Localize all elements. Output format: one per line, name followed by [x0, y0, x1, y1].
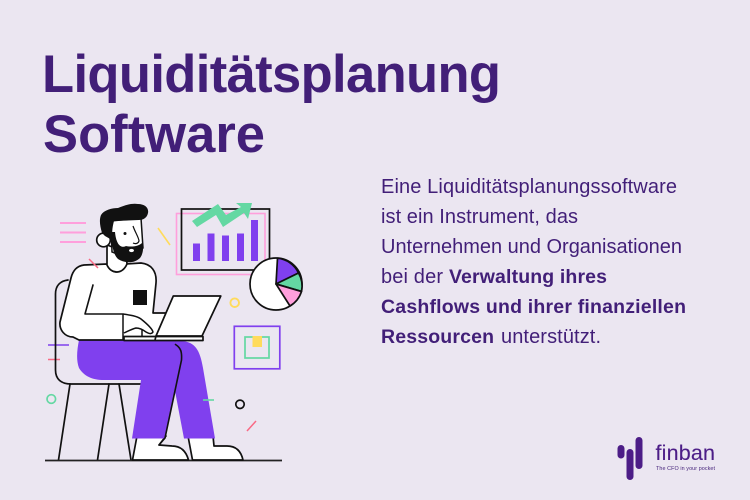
decorative accent: red shoulder dash: [89, 259, 98, 268]
body text block: ist ein Instrument, das: [381, 206, 578, 228]
decorative accent: red lower dash: [247, 421, 256, 431]
chart board with bars: [176, 209, 270, 274]
eye: [124, 232, 126, 235]
body text block: Ressourcen: [381, 326, 494, 348]
body text block: bei der: [381, 266, 443, 288]
body text block: Cashflows und ihrer finanziellen: [381, 296, 686, 318]
knee line: [159, 344, 182, 445]
logo tagline: The CFO in your pocket: [656, 466, 716, 472]
decorative accent: green dash: [203, 399, 214, 401]
title: Liquiditätsplanung: [42, 45, 501, 104]
title: [42, 45, 501, 164]
decorative accent: yellow dash: [158, 228, 170, 245]
shoes: [132, 436, 243, 460]
sleeve lines: [85, 285, 123, 314]
title: Software: [43, 105, 265, 164]
trousers: [77, 340, 215, 438]
laptop: [124, 296, 221, 340]
decorative accent: green circle: [47, 395, 56, 403]
logo mark bars: [621, 440, 639, 476]
framed box icon: [234, 326, 280, 369]
body text block: Eine Liquiditätsplanungssoftware: [381, 176, 677, 198]
icon: yellow ring: [230, 298, 239, 307]
body text block: Unternehmen und Organisationen: [381, 236, 682, 258]
neck: [107, 245, 127, 272]
mouth: [129, 249, 134, 252]
decorative accent: purple dash: [48, 344, 69, 346]
illustration: person at laptop with charts: [45, 203, 716, 476]
icon: green trend arrow: [192, 203, 252, 227]
decorative accent: black circle: [236, 400, 244, 408]
ear: [97, 233, 110, 247]
body text block: Verwaltung ihres: [449, 266, 607, 288]
torso: [60, 263, 168, 340]
decorative accent: pink lines: [60, 223, 86, 242]
nose: [133, 226, 139, 244]
hair: [100, 204, 148, 240]
decorative accent: red left dash: [48, 358, 60, 360]
chair: [56, 280, 141, 460]
pocket: [133, 290, 147, 305]
pie chart: [250, 258, 302, 310]
logo: finban: [621, 440, 716, 476]
logo wordmark: finban: [656, 441, 715, 465]
body text block: [381, 176, 686, 348]
hand: [123, 314, 153, 340]
body text block: unterstützt.: [501, 326, 601, 348]
face: [111, 218, 143, 258]
beard: [111, 232, 143, 262]
ground line: [45, 460, 282, 462]
